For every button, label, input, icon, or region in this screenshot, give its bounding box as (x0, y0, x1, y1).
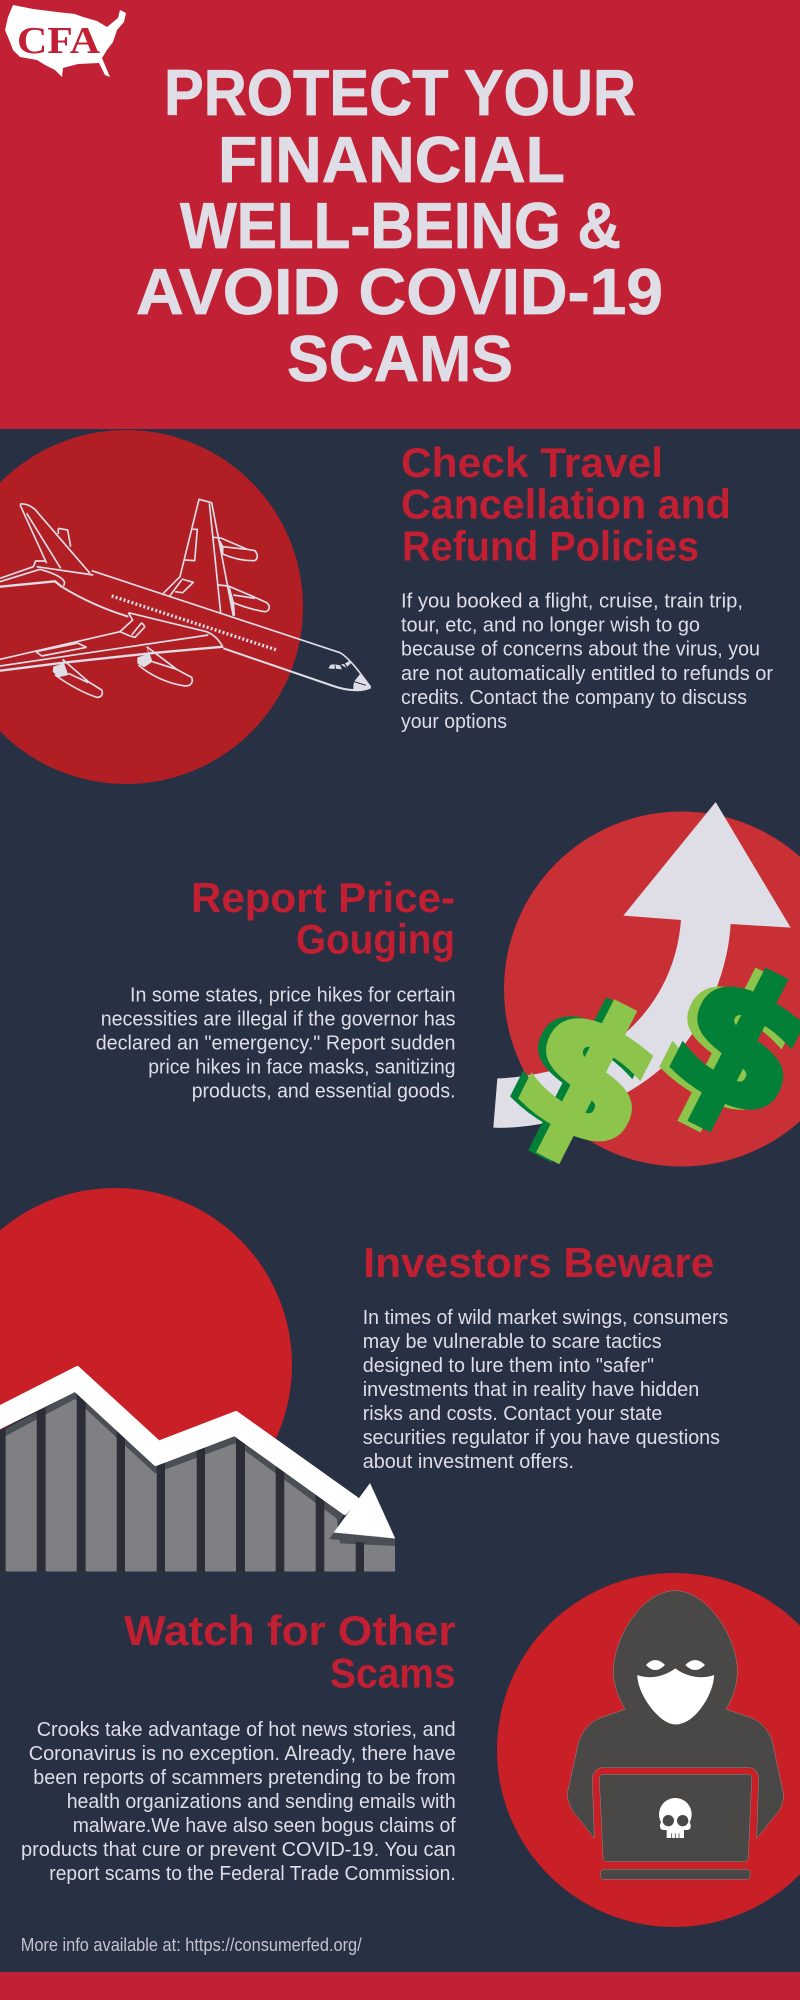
text block: price gouging: products, and essential goods. (192, 1080, 455, 1102)
text block: other scams: been reports of scammers pretending to be from (33, 1767, 456, 1789)
heading: travel (401, 439, 731, 570)
red circle behind hacker (497, 1573, 800, 1927)
heading: other scams: Scams (330, 1649, 456, 1696)
icon: hooded hacker with laptop (567, 1591, 783, 1879)
icon: airplane (0, 499, 371, 697)
text block: other scams: products that cure or prevent COVID-19. You can (21, 1839, 456, 1861)
text block: investors: In times of wild market swings, consumers (363, 1307, 728, 1329)
title (136, 56, 663, 395)
icon: skull (659, 1798, 692, 1838)
icon: CFA US map logo (5, 5, 126, 77)
heading: travel: Cancellation and (401, 480, 731, 528)
text block: travel: are not automatically entitled to refunds or (401, 663, 773, 685)
panel: investors (0, 1188, 728, 1572)
heading: travel: Check Travel (401, 439, 663, 486)
red circle behind arrow (504, 812, 800, 1166)
panel: other scams (21, 1573, 800, 1927)
text block: price gouging: In some states, price hikes for certain (130, 984, 456, 1006)
text block: price gouging: necessities are illegal if the governor has (101, 1008, 455, 1030)
text block: travel: your options (401, 711, 507, 733)
text block: price gouging: price hikes in face masks, sanitizing (148, 1056, 456, 1078)
footer band (0, 1972, 800, 2000)
heading: other scams (124, 1607, 456, 1696)
icon: dollar sign left: $ (488, 962, 690, 1192)
red circle behind plane (0, 430, 303, 784)
text block: travel: credits. Contact the company to discuss (401, 687, 747, 709)
icon: dollar sign left: $ (480, 960, 682, 1190)
heading: investors: Investors Beware (363, 1239, 714, 1286)
chart: falling bars with arrow (0, 1357, 395, 1572)
heading: price gouging (191, 874, 455, 962)
text block: investors: designed to lure them into "safer" (363, 1355, 654, 1377)
text block: investors (363, 1307, 728, 1473)
text block: investors: may be vulnerable to scare tactics (363, 1331, 662, 1353)
text block: investors: securities regulator if you have questions (363, 1427, 720, 1449)
text block: travel: because of concerns about the virus, you (401, 638, 760, 660)
text block: investors: about investment offers. (363, 1451, 574, 1473)
title: PROTECT YOUR (164, 56, 636, 129)
icon: rising arrow (493, 802, 791, 1128)
panel: price gouging (96, 802, 800, 1192)
red circle behind chart (0, 1188, 292, 1542)
text block: other scams: malware.We have also seen bogus claims of (73, 1815, 456, 1837)
heading: travel: Refund Policies (402, 522, 699, 570)
text block: price gouging: declared an "emergency." Report sudden (96, 1032, 455, 1054)
text block: travel (401, 590, 773, 733)
heading: price gouging: Gouging (296, 916, 455, 962)
text block: investors: risks and costs. Contact your state (363, 1403, 662, 1425)
text block: travel: If you booked a flight, cruise, train trip, (401, 590, 743, 612)
text block: other scams: health organizations and sending emails with (67, 1791, 456, 1813)
title: AVOID COVID-19 (136, 255, 663, 328)
title: FINANCIAL (218, 123, 565, 196)
title: SCAMS (287, 322, 513, 395)
text block: investors: investments that in reality have hidden (363, 1379, 699, 1401)
text block: price gouging (96, 984, 455, 1102)
header banner (0, 0, 800, 429)
footer text: More info available at: https://consumerfed.org/ (21, 1935, 362, 1955)
text block: other scams: report scams to the Federal Trade Commission. (49, 1863, 456, 1885)
heading: other scams: Watch for Other (124, 1607, 456, 1654)
icon: CFA US map logo: CFA (17, 20, 101, 62)
text block: travel: tour, etc, and no longer wish to go (401, 614, 700, 636)
icon: falling arrow (0, 1368, 395, 1538)
text block: other scams: Coronavirus is no exception. Already, there have (29, 1743, 456, 1765)
text block: other scams: Crooks take advantage of hot news stories, and (37, 1719, 456, 1741)
heading: price gouging: Report Price- (191, 874, 455, 921)
text block: other scams (21, 1719, 456, 1885)
panel: travel (0, 430, 773, 784)
title: WELL-BEING & (180, 189, 621, 262)
